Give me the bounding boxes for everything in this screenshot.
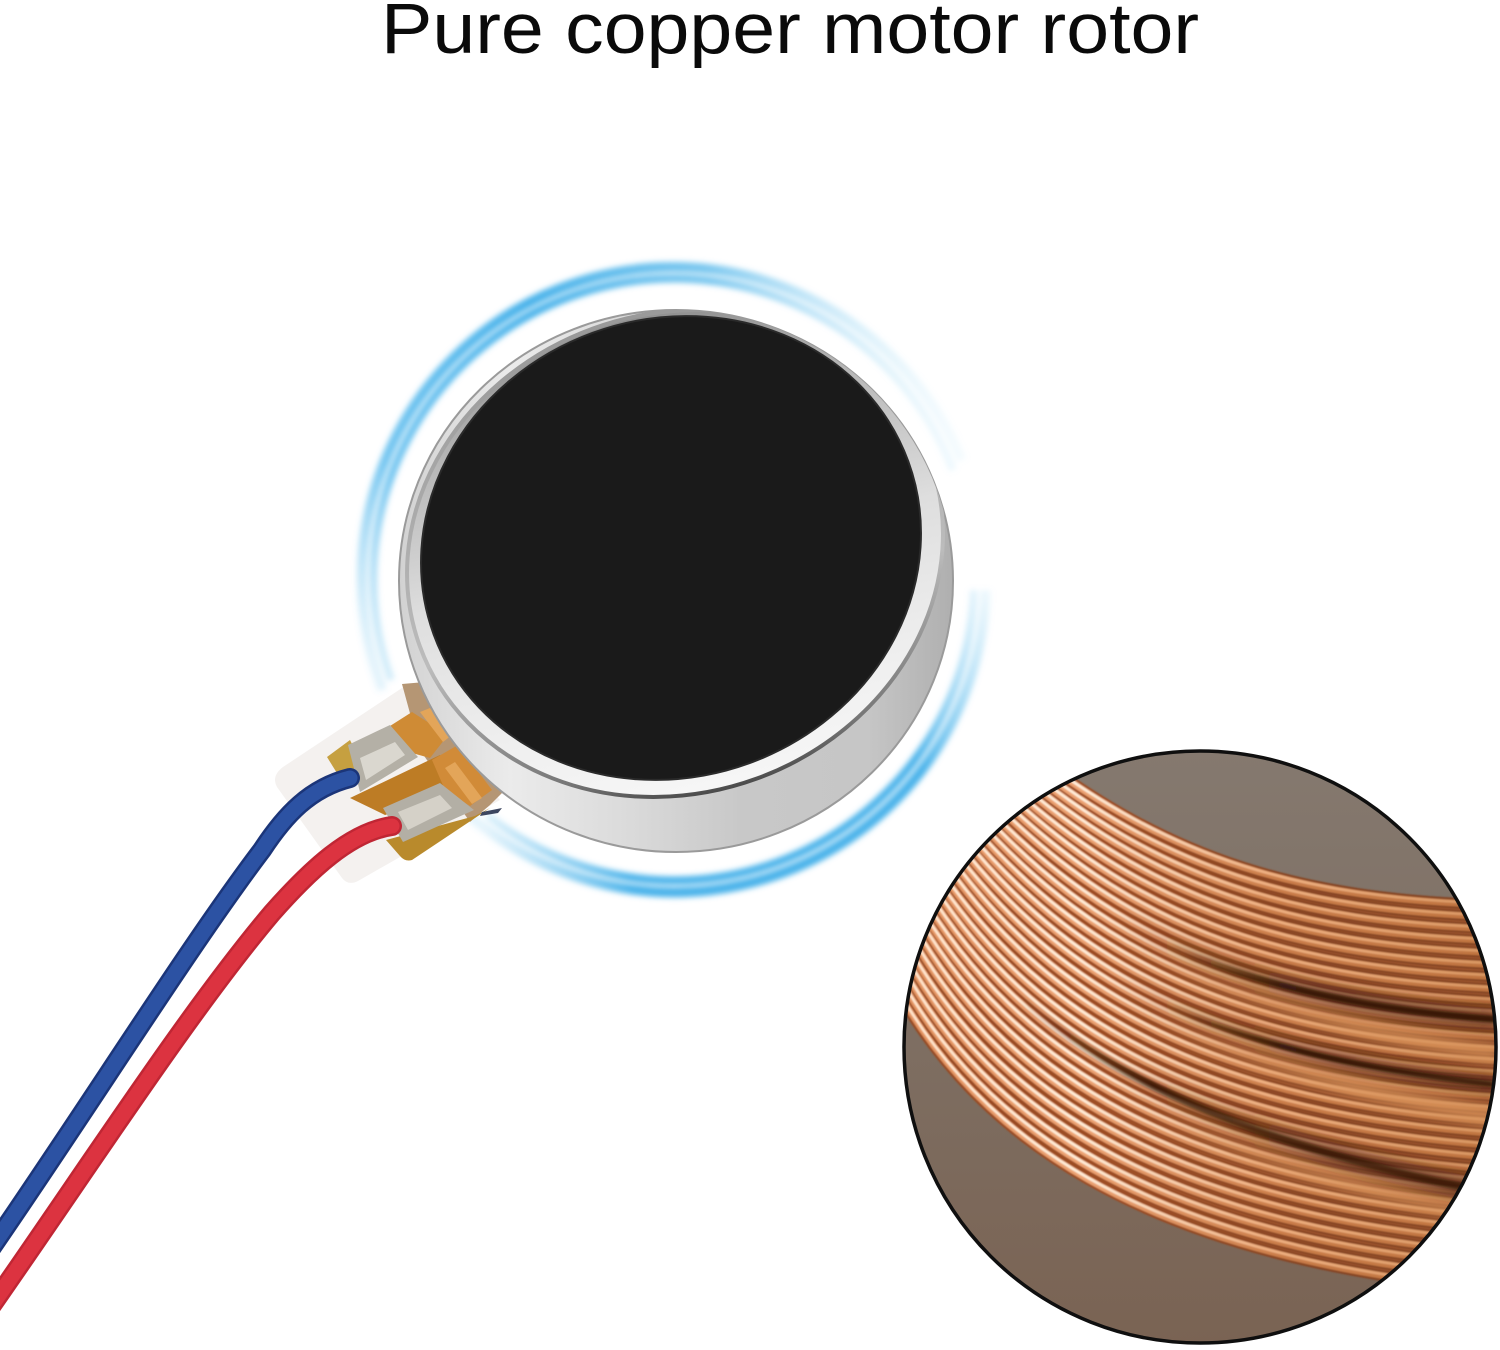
- silver solder pad one: [348, 725, 418, 792]
- icon: blue vibration rings around the motor: [362, 267, 986, 892]
- black top face: [355, 246, 987, 850]
- orange flex strip: [350, 755, 470, 815]
- inset: copper wire coil close-up: [875, 748, 1500, 1343]
- inset black outline: [904, 751, 1496, 1343]
- dark creases between layers: [1026, 946, 1494, 1192]
- icon: coin vibration motor: [398, 309, 954, 853]
- metal side wall: [399, 310, 953, 852]
- copper coil windings: [907, 779, 1494, 1281]
- metal top rim: [405, 311, 944, 799]
- translucent brown film: [402, 682, 505, 822]
- motor connector tab with solder pads: [275, 682, 505, 883]
- warm blurred highlights on the right: [1180, 965, 1494, 1219]
- red wire: [0, 826, 392, 1308]
- silver solder pad two: [383, 783, 474, 842]
- white insulating tape: [275, 686, 500, 883]
- inset background: [904, 751, 1496, 1343]
- wide soft shadows on the right: [1138, 924, 1494, 1204]
- dark shadow at body join: [480, 808, 502, 816]
- gold flex base: [386, 808, 490, 860]
- blue wire: [0, 778, 350, 1250]
- orange solder bumps: [390, 712, 448, 758]
